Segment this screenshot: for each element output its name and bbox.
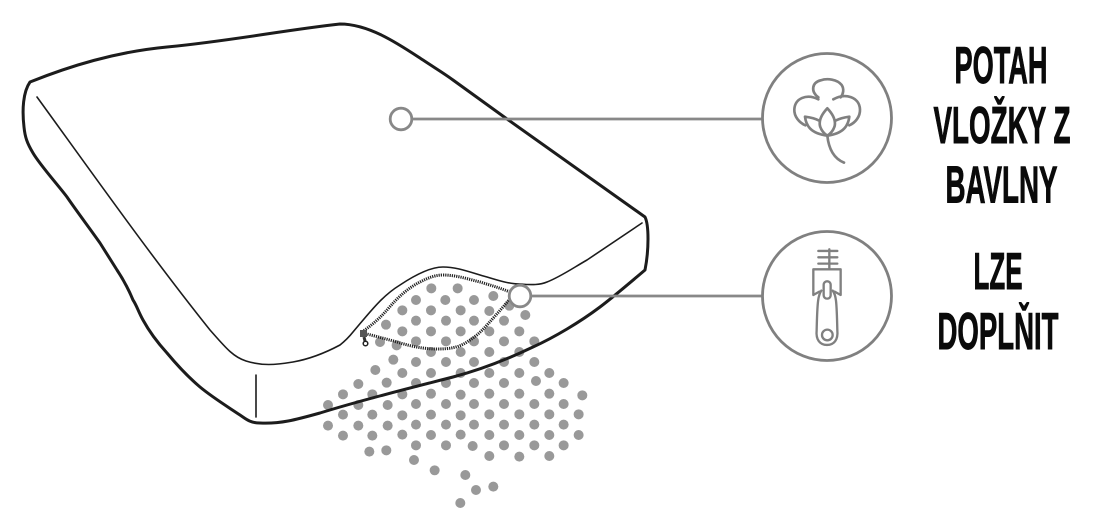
pillow inner seam <box>37 97 642 364</box>
connector: zipper <box>509 285 762 307</box>
filling dots spilling from the pillow <box>323 283 587 508</box>
icon: cotton flower in circle <box>762 54 892 182</box>
zipper <box>360 275 513 349</box>
zipper pull <box>360 330 368 346</box>
zipper glyph <box>813 249 841 345</box>
connector: cover <box>390 108 762 130</box>
cotton glyph <box>794 79 860 163</box>
label: can be refilled: LZE <box>974 243 1022 301</box>
zipper teeth <box>362 275 510 332</box>
front corner seam <box>255 375 257 417</box>
pillow illustration <box>23 24 648 423</box>
pillow outer outline <box>23 24 648 423</box>
label: can be refilled <box>938 243 1059 361</box>
icon: zipper slider in circle <box>762 232 892 360</box>
label: cover made of cotton <box>934 37 1070 214</box>
